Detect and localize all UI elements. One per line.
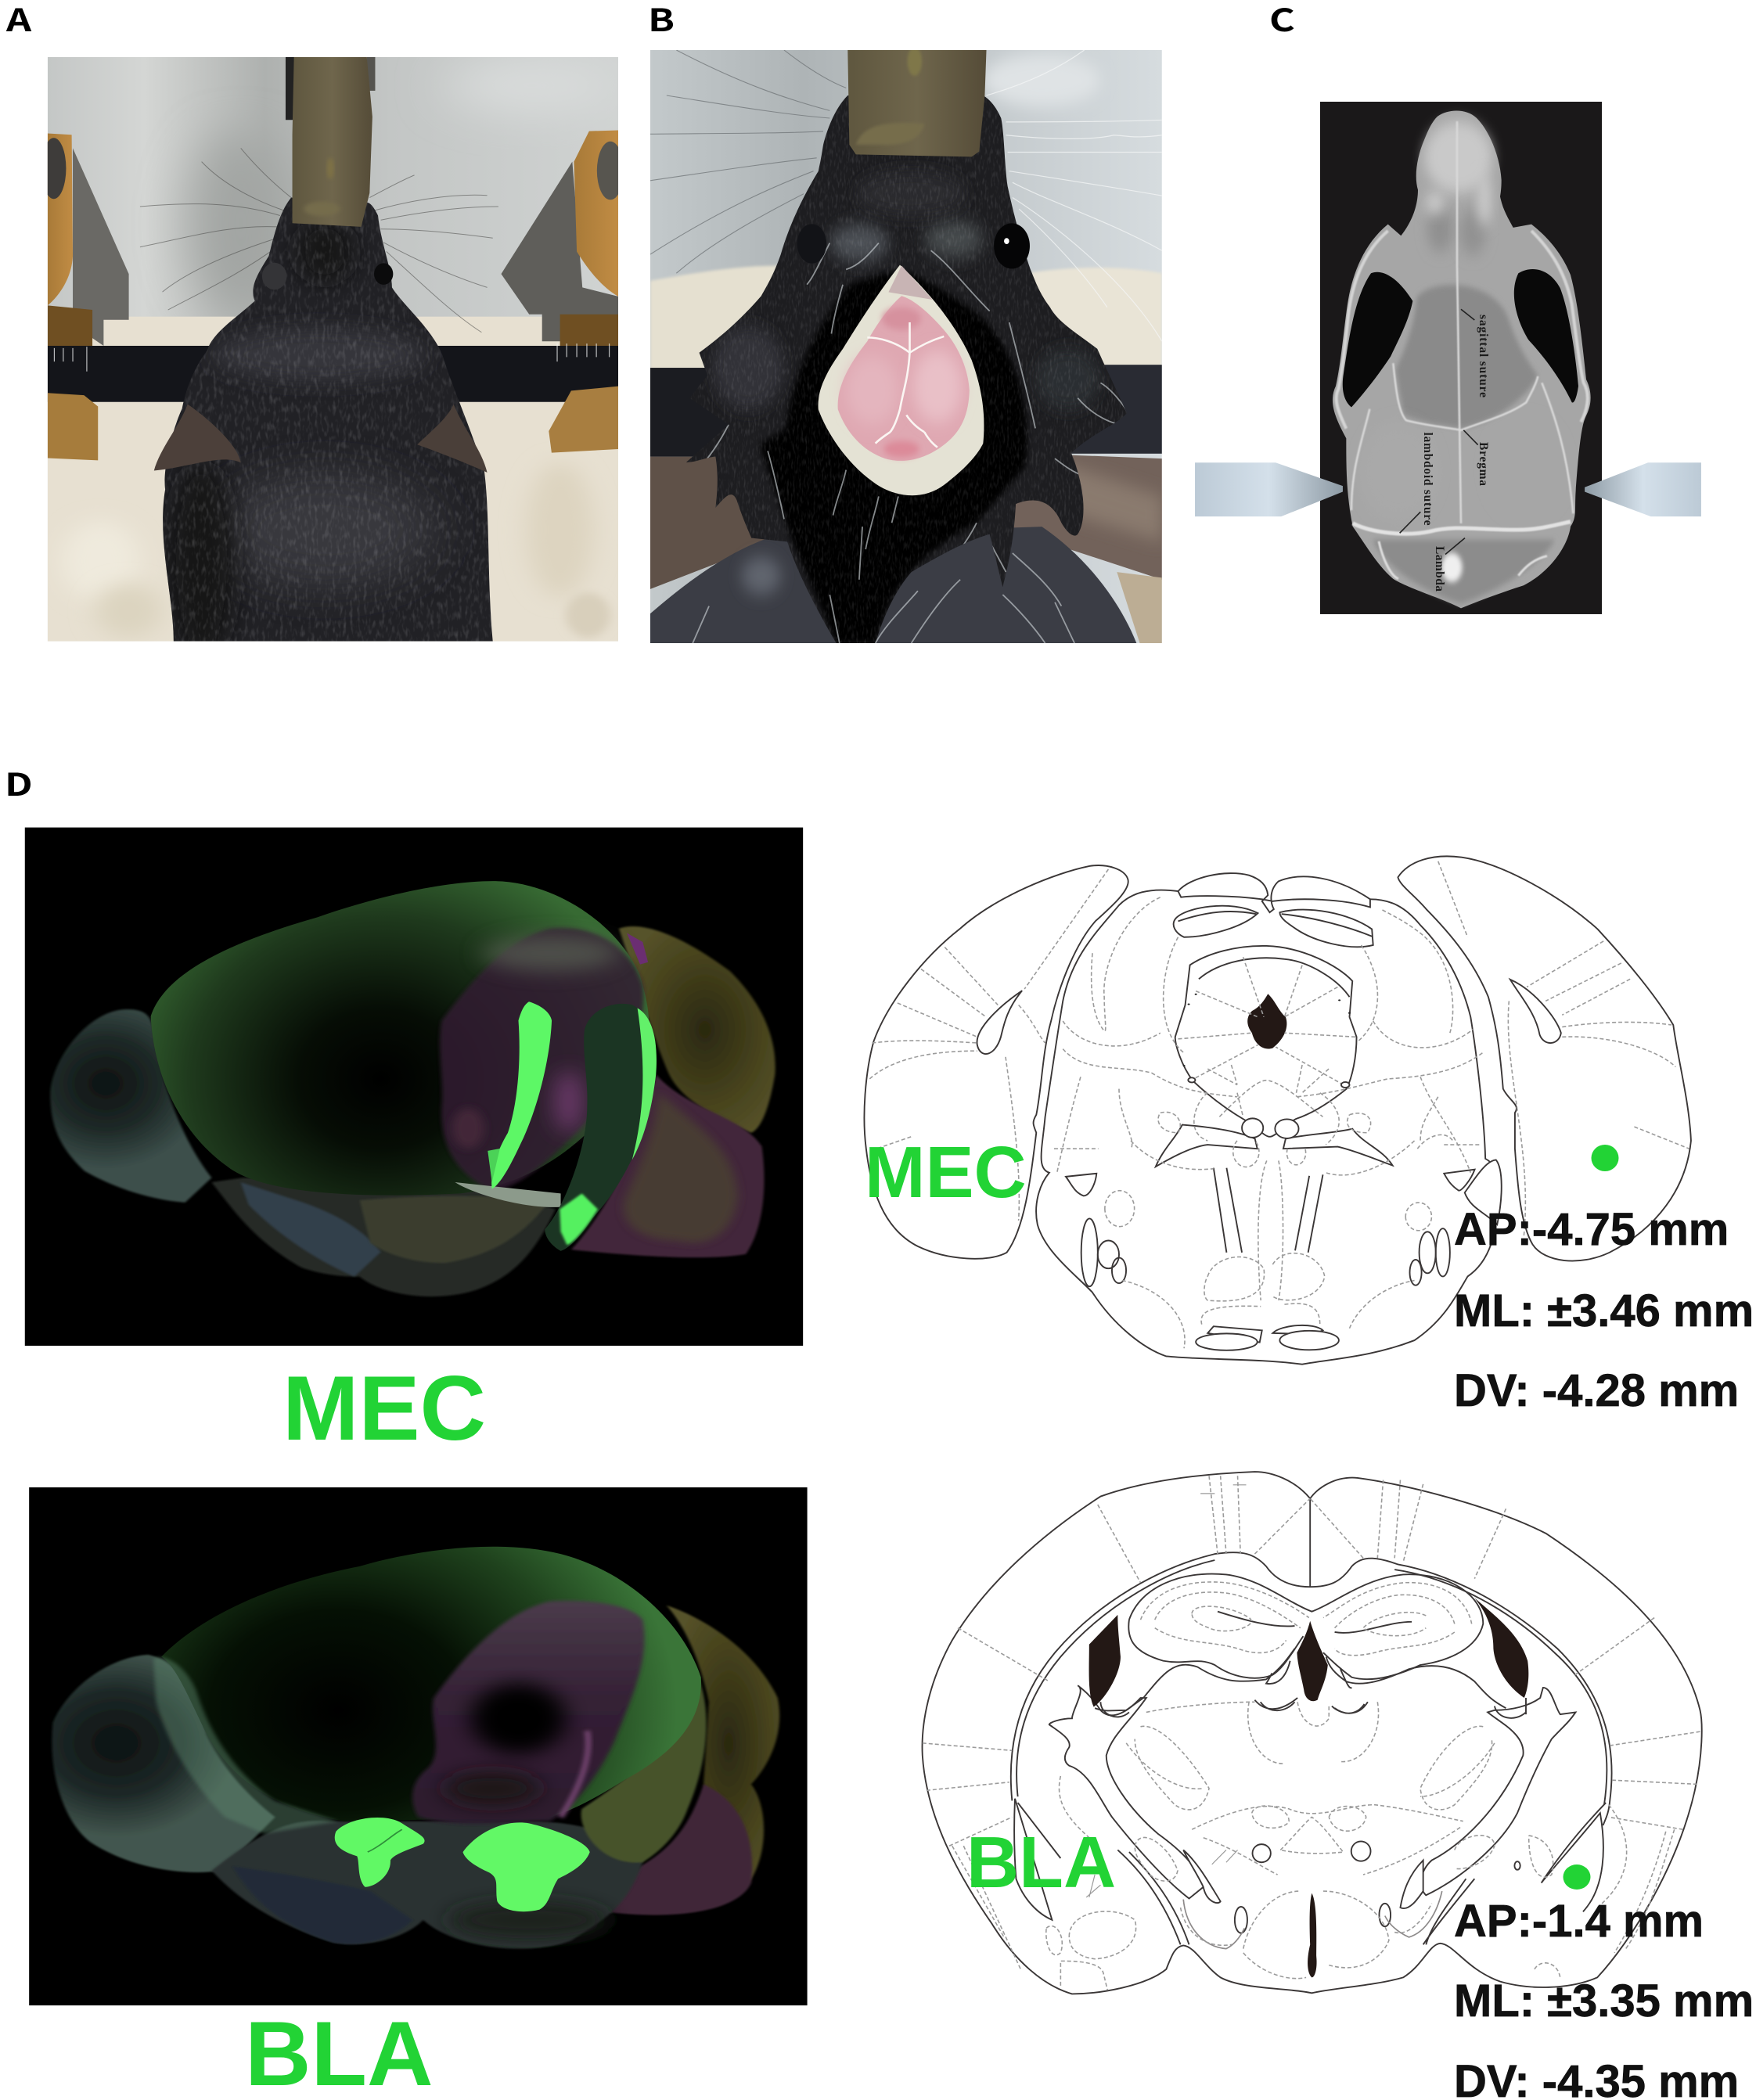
- right frame: [501, 130, 624, 346]
- side elongated nuclei: [1066, 1160, 1502, 1286]
- dark ventricle right: [1474, 1598, 1528, 1698]
- MEC label under 3D brain: MEC: [282, 1357, 486, 1459]
- right ear bar: [1585, 462, 1701, 516]
- BLA coordinates: AP:-1.4 mm: [1454, 1896, 1704, 1947]
- panel A: photo of mouse in stereotaxic frame: [41, 57, 624, 660]
- holder slivers: [286, 57, 375, 120]
- whiskers: [140, 148, 498, 333]
- holder: [847, 47, 987, 156]
- lateral ventricle slits: [977, 980, 1561, 1054]
- panel D2: coronal section at MEC level: [864, 856, 1691, 1365]
- small pons band: [455, 1182, 561, 1207]
- panel D3: 3D brain with BLA highlighted: [29, 1487, 808, 2005]
- BLA blob small: [335, 1818, 425, 1887]
- cerebrum: [151, 881, 649, 1196]
- ear bar: [48, 343, 618, 402]
- ear bars: [650, 365, 1162, 457]
- lower structures: [1156, 1118, 1393, 1350]
- panel B: photo of exposed mouse skull: [650, 47, 1162, 643]
- wall light patch: [983, 54, 1100, 107]
- skull shading: [1359, 121, 1565, 603]
- BLA coordinates: ML: ±3.35 mm: [1454, 1976, 1754, 2026]
- brass feet: [48, 387, 618, 460]
- skull: [1333, 111, 1591, 608]
- MEC coordinates: DV: -4.28 mm: [1454, 1365, 1739, 1416]
- panel C: skull photograph with ear bars: [1195, 102, 1701, 614]
- small circles: [1188, 1077, 1349, 1088]
- arched thalamic border: [1095, 1649, 1526, 1718]
- fur shading: [650, 88, 1162, 643]
- wall shading: [190, 59, 616, 319]
- BLA blob large: [463, 1822, 590, 1911]
- mouse body: [163, 198, 493, 642]
- central body: [1036, 890, 1501, 1365]
- aqueduct: [1247, 994, 1286, 1048]
- skull labels: sagittal suture: [1477, 315, 1490, 397]
- holder: [293, 57, 372, 227]
- midbrain: [440, 928, 643, 1192]
- cerebrum: [161, 1547, 701, 1821]
- body streaks: [693, 553, 1074, 643]
- skull labels: Lambda: [1433, 546, 1446, 592]
- MEC label on coronal section: MEC: [865, 1131, 1027, 1213]
- BLA label on coronal section: BLA: [966, 1821, 1116, 1903]
- cross ticks: [1086, 1485, 1246, 1897]
- left ear bar: [1195, 462, 1343, 516]
- exposed skull window: [819, 265, 984, 495]
- eyes: [262, 263, 393, 289]
- fur texture: [151, 193, 498, 660]
- dashed anatomical lines: [869, 861, 1689, 1348]
- hippocampal dashed layers: [1141, 1582, 1472, 1656]
- brainstem: [571, 1074, 765, 1257]
- outer contour: [923, 1472, 1702, 1994]
- skull labels: [1421, 315, 1490, 592]
- right lobe: [1398, 856, 1691, 1261]
- bedding right: [1026, 268, 1162, 368]
- inner MEC strip: [491, 1001, 552, 1189]
- purple tip: [627, 933, 648, 965]
- third ventricle top: [1297, 1621, 1328, 1701]
- midline and inner contour: [1011, 1498, 1612, 1825]
- ears: [154, 405, 488, 473]
- bedding: [48, 317, 618, 642]
- left lobe: [864, 865, 1128, 1259]
- green injection dot: [1563, 1864, 1590, 1890]
- panel D1: 3D brain with MEC highlighted: [25, 828, 803, 1346]
- fimbria / lateral tracts: [1014, 1799, 1606, 1949]
- lower left shoulder: [650, 457, 787, 589]
- tiny dots: [1183, 994, 1351, 1066]
- periaqueductal outline: [1175, 946, 1357, 1137]
- skull labels: lambdoid suture: [1421, 432, 1434, 526]
- third ventricle bottom: [1308, 1893, 1317, 1977]
- ventral forebrain: [211, 1821, 646, 1949]
- panel label D: D: [5, 760, 33, 805]
- ventral forebrain: [211, 1178, 556, 1296]
- olfactory bulb: [52, 1655, 275, 1872]
- dark ventricle left: [1089, 1615, 1121, 1707]
- green injection dot: [1592, 1145, 1618, 1171]
- outer olive-green shell: [581, 1677, 707, 1863]
- olfactory bulb: [50, 1009, 211, 1203]
- MEC coordinates: [1454, 1204, 1754, 1416]
- left frame: [41, 133, 129, 346]
- dashed anatomical lines: [923, 1476, 1700, 1990]
- panel D4: coronal section at BLA level: [923, 1472, 1702, 1994]
- zygomatic highlights: [1337, 231, 1588, 429]
- BLA coordinates: [1454, 1896, 1754, 2100]
- whiskers: [650, 50, 1162, 341]
- white matter branches left: [1049, 1685, 1204, 1898]
- lower right tan area: [1009, 453, 1162, 580]
- outer MEC crescent: [545, 1004, 657, 1251]
- pointer lines: [1400, 309, 1478, 555]
- cerebellum: [667, 1606, 779, 1883]
- colliculi: [1174, 873, 1373, 947]
- bedding left: [650, 266, 781, 372]
- translucent front band: [153, 1657, 339, 1833]
- lower grey body: [650, 527, 1136, 643]
- sutures: [1351, 121, 1573, 579]
- mouse fur: [686, 95, 1127, 643]
- eyes: [797, 223, 1030, 268]
- midbrain: [412, 1601, 645, 1824]
- black background: [1320, 102, 1602, 614]
- hindbrain: [603, 1784, 752, 1915]
- MEC coordinates: ML: ±3.46 mm: [1454, 1286, 1754, 1336]
- MEC coordinates: AP:-4.75 mm: [1454, 1204, 1729, 1255]
- skull labels: Bregma: [1477, 442, 1490, 486]
- eye sockets: [1343, 269, 1578, 408]
- cerebellum: [619, 926, 775, 1133]
- hippocampus outline left: [1128, 1574, 1483, 1679]
